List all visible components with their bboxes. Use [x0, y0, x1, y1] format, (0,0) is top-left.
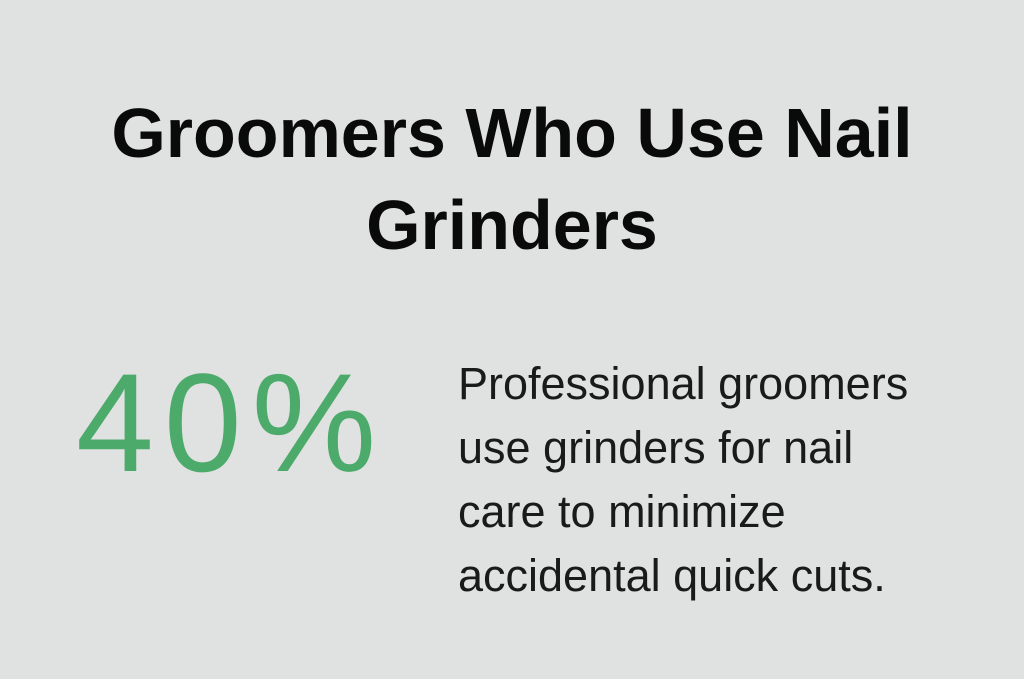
description text: [458, 358, 908, 601]
description text: accidental quick cuts.: [458, 550, 886, 601]
statistic: 40%: 40%: [76, 344, 386, 501]
title: Groomers Who Use Nail: [111, 94, 913, 172]
description text: Professional groomers: [458, 358, 908, 409]
title: [111, 94, 913, 264]
title: Grinders: [366, 186, 658, 264]
description text: care to minimize: [458, 486, 786, 537]
description text: use grinders for nail: [458, 422, 853, 473]
